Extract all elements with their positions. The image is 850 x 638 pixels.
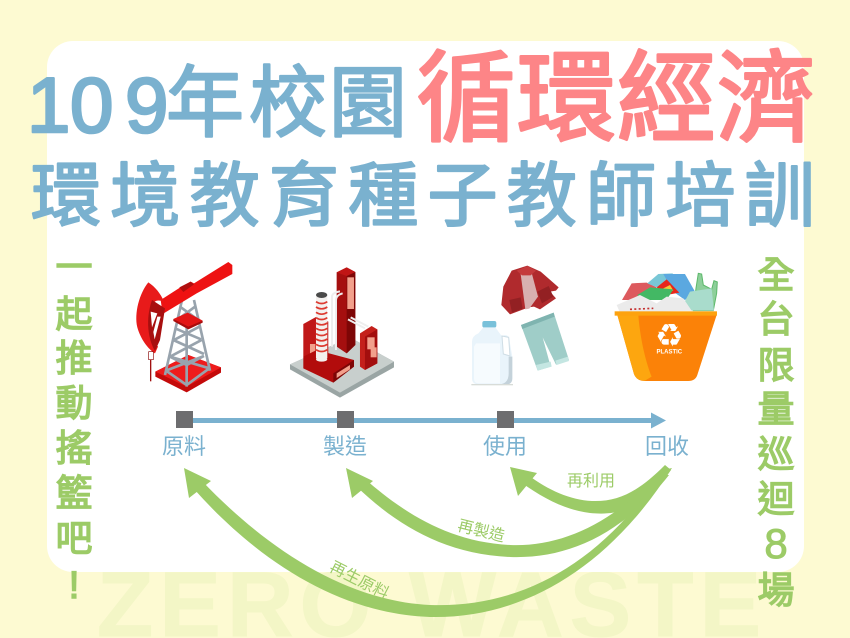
timeline labels: 原料 — [162, 434, 206, 459]
left vertical slogan: 一 — [56, 247, 92, 288]
icon: recycling bin with plastic waste — [615, 273, 717, 381]
timeline labels: 使用 — [483, 434, 527, 459]
left vertical slogan — [56, 247, 92, 607]
timeline arrow — [184, 412, 666, 428]
arrow label: remanufacture: 再製造 — [456, 517, 507, 546]
icon: oil pump jack — [136, 262, 232, 392]
left vertical slogan: 動 — [56, 383, 92, 424]
left vertical slogan: 吧 — [56, 518, 92, 559]
left vertical slogan: 籃 — [56, 473, 92, 514]
right vertical slogan: 限 — [758, 345, 794, 386]
timeline labels — [162, 434, 689, 459]
left vertical slogan: ! — [69, 565, 79, 607]
left vertical slogan: 搖 — [56, 428, 92, 469]
arrow label: reuse: 再利用 — [567, 472, 615, 490]
timeline labels: 製造 — [323, 434, 367, 459]
icon: recycling bin with plastic waste: PLASTIC — [657, 349, 683, 355]
green return arrow: recycled raw material — [184, 468, 672, 617]
right vertical slogan: 場 — [758, 570, 794, 611]
green return arrow: reuse — [510, 465, 671, 514]
title line 1: blue digits: 109 — [27, 61, 168, 149]
timeline node: raw material — [176, 411, 193, 428]
right vertical slogan: 巡 — [758, 434, 794, 475]
timeline node: use — [497, 411, 514, 428]
title line 2: 環境教育種子教師培訓 — [31, 157, 815, 235]
timeline labels: 回收 — [645, 434, 689, 459]
right vertical slogan: 迴 — [758, 479, 794, 520]
arrow label: recycled raw material: 再生原料 — [327, 558, 392, 603]
icon: recycling bin with plastic waste: ♻ — [655, 317, 684, 355]
green return arrow: remanufacture — [346, 468, 669, 557]
icon: jeans — [521, 313, 569, 371]
left vertical slogan: 起 — [56, 294, 92, 335]
icon: jacket — [501, 266, 559, 314]
icon: factory — [290, 267, 394, 398]
title line 1: blue: 年校園 — [166, 59, 407, 147]
left vertical slogan: 推 — [56, 338, 92, 379]
right vertical slogan: 量 — [758, 389, 794, 430]
icon: milk bottle — [471, 321, 513, 385]
right vertical slogan: 台 — [758, 299, 794, 340]
title line 1: pink highlight: 循環經濟 — [417, 43, 816, 154]
timeline node: manufacturing — [337, 411, 354, 428]
right vertical slogan — [758, 255, 794, 611]
right vertical slogan: 全 — [758, 255, 794, 296]
white content panel — [47, 41, 804, 572]
right vertical slogan: 8 — [764, 520, 788, 567]
